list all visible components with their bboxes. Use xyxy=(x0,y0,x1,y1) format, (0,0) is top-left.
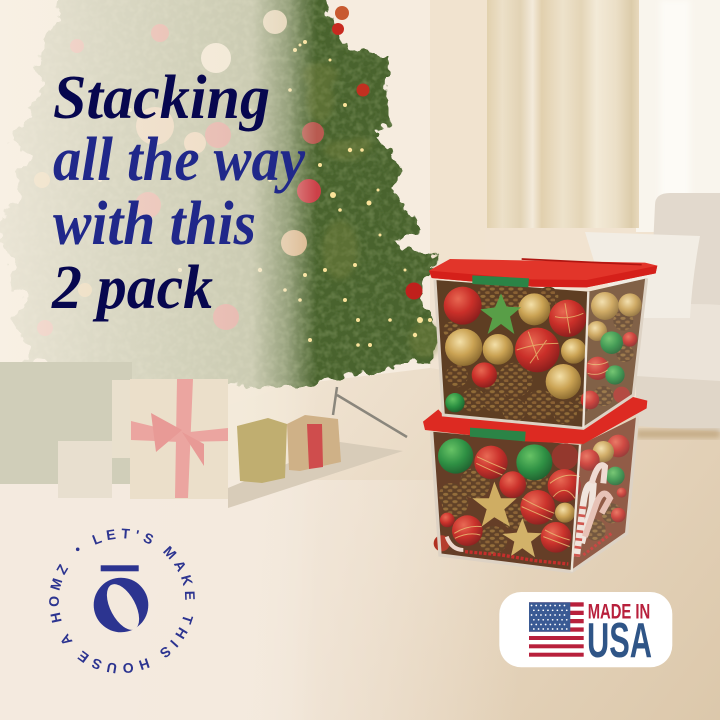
heading: Stacking xyxy=(53,64,270,132)
red lid xyxy=(423,397,647,444)
gifts xyxy=(0,362,341,499)
tree stand xyxy=(333,387,407,437)
candy canes xyxy=(577,484,593,557)
window xyxy=(636,0,720,232)
green star xyxy=(480,293,521,334)
christmas tree xyxy=(0,0,441,387)
floor xyxy=(0,368,720,720)
tan gift with red ribbon xyxy=(287,415,341,471)
olive patches xyxy=(302,63,441,358)
green clip xyxy=(470,428,526,441)
plastic haze xyxy=(432,432,580,572)
ornaments and lights xyxy=(34,6,432,347)
bottom box xyxy=(423,397,647,572)
heading: all the way xyxy=(53,126,305,194)
red lid xyxy=(429,259,657,287)
made in: MADE IN xyxy=(588,598,650,623)
logo mark: o with macron xyxy=(94,565,148,635)
plastic haze xyxy=(435,280,588,428)
small white gift xyxy=(58,441,112,498)
made in usa badge xyxy=(499,592,672,668)
product: stacked storage boxes xyxy=(423,259,657,572)
gold stars xyxy=(472,482,517,527)
box body xyxy=(435,280,588,428)
bead garland xyxy=(465,552,568,564)
heading xyxy=(51,64,305,322)
box body xyxy=(432,432,580,572)
heading: 2 pack xyxy=(51,254,213,322)
usa: USA xyxy=(587,614,652,668)
large muted gift at the back xyxy=(0,362,132,484)
heading: with this xyxy=(53,190,256,258)
ball stripes xyxy=(454,457,580,547)
box contents xyxy=(434,435,630,564)
pillow xyxy=(585,232,700,318)
us flag xyxy=(529,602,584,657)
circular tagline: LET'S MAKE THIS HOUSE A HOMZ xyxy=(49,528,195,674)
ball patterns xyxy=(517,303,608,374)
top box xyxy=(429,259,657,428)
logo badge xyxy=(49,528,195,674)
box contents xyxy=(443,281,642,424)
rug xyxy=(228,442,403,508)
green clip xyxy=(472,275,529,287)
curtain xyxy=(487,0,639,228)
sofa xyxy=(585,193,720,438)
large cream gift with ribbon xyxy=(130,379,228,499)
gold gift xyxy=(237,418,287,483)
